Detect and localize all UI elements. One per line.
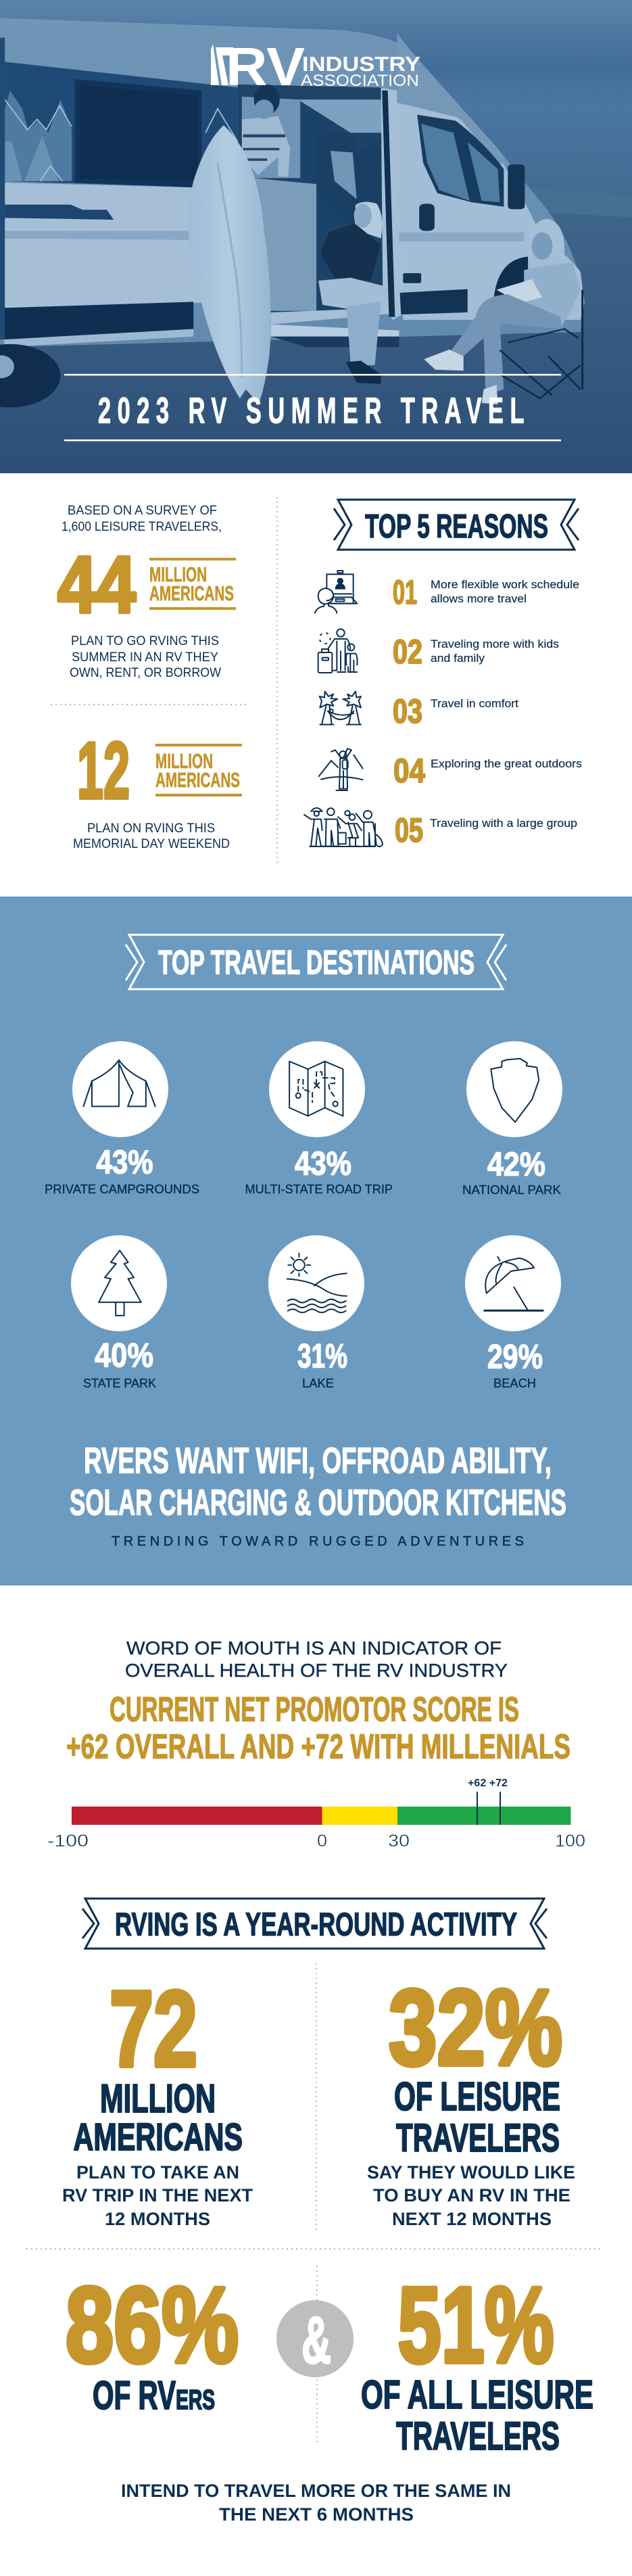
woman in doorway	[355, 201, 382, 239]
subheading: trending: TRENDING TOWARD RUGGED ADVENTURES	[112, 1534, 524, 1549]
destination: beach	[465, 1235, 561, 1390]
heading: current nps	[66, 1690, 570, 1766]
logo	[211, 37, 420, 97]
stat: 32 percent of leisure travelers	[367, 1967, 575, 2229]
sky	[0, 0, 632, 229]
chart: nps scale bar: 30	[388, 1832, 410, 1851]
text: word of mouth	[125, 1638, 508, 1681]
text: memorial day	[73, 821, 230, 851]
stat: 12 million americans	[77, 726, 242, 815]
logo: RV	[226, 37, 305, 97]
panel: net promoter score	[47, 1638, 585, 1851]
text: memorial day: MEMORIAL DAY WEEKEND	[73, 836, 230, 851]
text: plan to go rving: PLAN TO GO RVING THIS	[71, 634, 219, 648]
destination: lake: 31%	[297, 1337, 347, 1375]
panel: hero photo	[0, 0, 632, 473]
cab upper	[397, 33, 508, 164]
destination: state park: 40%	[95, 1336, 153, 1374]
stat: 72 million americans	[62, 1969, 253, 2229]
survey intro: BASED ON A SURVEY OF	[68, 503, 217, 518]
stat: 44 million americans: 44	[57, 540, 136, 630]
logo: ASSOCIATION	[301, 72, 419, 90]
callout: rvers want	[70, 1440, 566, 1523]
stat: 72 million americans: AMERICANS	[73, 2116, 243, 2159]
tree graphics	[5, 91, 72, 181]
stat: 72 million americans: MILLION	[100, 2076, 216, 2121]
text: plan to go rving: OWN, RENT, OR BORROW	[70, 665, 222, 680]
destination: private campgrounds: PRIVATE CAMPGROUNDS	[45, 1183, 199, 1196]
ribbon: top 5 reasons	[334, 500, 579, 550]
step	[271, 308, 389, 325]
left edge strip	[0, 38, 5, 339]
reason 2: Traveling more with kids	[431, 638, 559, 650]
chart: nps scale bar	[47, 1778, 585, 1851]
destination: multi-state road trip: MULTI-STATE ROAD TRIP	[245, 1183, 393, 1196]
stat: 12 million americans: MILLION	[155, 749, 213, 773]
text: intend to travel: THE NEXT 6 MONTHS	[219, 2504, 414, 2525]
stat: 72 million americans: PLAN TO TAKE AN	[76, 2162, 239, 2183]
lower body panel	[5, 183, 238, 308]
ribbon: rving is a year-round activity	[82, 1899, 547, 1949]
text: intend to travel	[121, 2481, 511, 2525]
text: word of mouth: WORD OF MOUTH IS AN INDICATOR OF	[126, 1638, 502, 1659]
door interior	[238, 85, 393, 314]
stat: 72 million americans: 72	[110, 1969, 197, 2089]
panel: survey stats	[51, 503, 249, 851]
cab door	[397, 103, 585, 320]
survey intro	[62, 503, 222, 534]
counter	[254, 178, 316, 311]
destination: national park: NATIONAL PARK	[462, 1183, 561, 1197]
cab seat	[314, 131, 387, 229]
reason 5: 05	[395, 811, 423, 849]
stat: 72 million americans: 12 MONTHS	[105, 2209, 210, 2229]
cab window	[417, 115, 504, 207]
chart: nps scale bar: 0	[317, 1832, 327, 1851]
stat: 72 million americans: RV TRIP IN THE NEXT	[62, 2185, 253, 2205]
reason 4: 04	[393, 752, 425, 790]
camp chair	[500, 290, 583, 398]
ampersand badge	[276, 2300, 354, 2377]
destination: beach: BEACH	[493, 1377, 536, 1390]
stat: 32 percent of leisure travelers: NEXT 12 MONTHS	[392, 2209, 552, 2229]
destination: private campgrounds	[45, 1041, 199, 1196]
reason 4: Exploring the great outdoors	[431, 757, 582, 770]
stat: 32 percent of leisure travelers: 32%	[389, 1967, 562, 2088]
destination: lake: LAKE	[302, 1377, 334, 1390]
surfboard	[189, 125, 271, 405]
ribbon: top travel destinations	[126, 934, 506, 989]
ribbon: top travel destinations: TOP TRAVEL DESTINATIONS	[158, 944, 475, 982]
stat: 86 percent of rvers: OF RVERS	[93, 2373, 215, 2418]
mirror	[508, 164, 525, 209]
door frame	[381, 87, 403, 320]
reason 1: 01	[393, 573, 417, 611]
chart: nps scale bar: -100	[47, 1832, 89, 1851]
reason 3: Travel in comfort	[431, 697, 518, 710]
icon: tent	[83, 1060, 155, 1106]
panel: top travel destinations	[0, 897, 632, 1585]
text: memorial day: PLAN ON RVING THIS	[87, 821, 215, 836]
icon: hiker with mountains	[319, 748, 363, 790]
reason 2: 02	[393, 633, 422, 671]
destination: state park	[71, 1235, 167, 1390]
destination: private campgrounds: 43%	[96, 1144, 153, 1180]
reason 1: allows more travel	[431, 592, 527, 605]
wheel arch	[493, 256, 528, 299]
destination: lake	[268, 1235, 364, 1390]
text: plan to go rving	[70, 634, 222, 680]
stat: 32 percent of leisure travelers: OF LEISURE	[394, 2074, 560, 2119]
cab lower stripe	[400, 289, 468, 314]
stat: 51 percent of all leisure travelers: 51%	[397, 2265, 554, 2385]
logo: INDUSTRY	[302, 52, 420, 76]
side window	[74, 79, 201, 188]
panel: top 5 reasons	[304, 500, 582, 849]
stat: 32 percent of leisure travelers: TRAVELERS	[396, 2116, 560, 2160]
grey line on body	[399, 233, 524, 241]
icon: hammock and palms	[320, 692, 361, 725]
front wheel	[0, 344, 60, 408]
icon: pine tree	[99, 1250, 141, 1316]
ribbon: top 5 reasons: TOP 5 REASONS	[365, 508, 548, 545]
grass field	[0, 211, 632, 473]
icon: remote worker	[315, 571, 357, 613]
stat: 86 percent of rvers	[66, 2265, 239, 2418]
side trim	[5, 205, 114, 220]
reason 1	[393, 573, 579, 611]
man	[242, 116, 290, 176]
icon: family with suitcase	[318, 629, 358, 673]
dark decor band	[5, 62, 238, 189]
stat: 51 percent of all leisure travelers: TRAVELERS	[396, 2414, 560, 2458]
van body	[0, 18, 585, 347]
text: word of mouth: OVERALL HEALTH OF THE RV INDUSTRY	[125, 1660, 508, 1681]
reason 5	[395, 811, 577, 849]
reason 5: Traveling with a large group	[430, 817, 577, 830]
text: intend to travel: INTEND TO TRAVEL MORE OR THE SAME IN	[121, 2481, 511, 2501]
text: plan to go rving: SUMMER IN AN RV THEY	[72, 650, 218, 665]
distant hills	[532, 189, 632, 229]
reason 1: More flexible work schedule	[431, 578, 579, 591]
destination: national park	[462, 1041, 562, 1197]
destination: state park: STATE PARK	[83, 1377, 156, 1390]
icon: sun over lake	[287, 1254, 347, 1312]
stat: 12 million americans: AMERICANS	[155, 768, 240, 792]
icon: map	[289, 1062, 343, 1116]
seated woman	[528, 219, 564, 260]
reason 3	[393, 692, 518, 730]
stat: 32 percent of leisure travelers: TO BUY AN RV IN THE	[373, 2185, 570, 2205]
icon: travel group	[304, 808, 383, 846]
chart: nps scale bar: 100	[555, 1832, 585, 1851]
stat: 44 million americans: MILLION	[149, 563, 207, 586]
icon: beach umbrella	[485, 1257, 543, 1310]
stat: 32 percent of leisure travelers: SAY THEY WOULD LIKE	[367, 2162, 575, 2183]
destination: national park: 42%	[487, 1147, 545, 1183]
chart: nps scale bar: +62 +72	[468, 1778, 508, 1789]
stat: 44 million americans: AMERICANS	[149, 581, 234, 605]
ampersand badge: &	[301, 2303, 331, 2377]
destination: multi-state road trip: 43%	[295, 1145, 351, 1182]
stat: 51 percent of all leisure travelers	[361, 2265, 593, 2458]
panel: year-round stats	[26, 1963, 600, 2525]
door handle	[419, 204, 435, 231]
stat: 12 million americans: 12	[77, 726, 130, 815]
survey intro: 1,600 LEISURE TRAVELERS,	[62, 519, 222, 534]
destination: multi-state road trip	[245, 1041, 393, 1196]
icon: arrowhead	[491, 1059, 539, 1122]
stat: 44 million americans	[57, 540, 236, 630]
reason 2: and family	[431, 652, 485, 665]
reason 4	[393, 752, 582, 790]
destination: beach: 29%	[487, 1337, 543, 1375]
reason 2	[393, 633, 559, 671]
reason 3: 03	[393, 692, 422, 730]
stat: 86 percent of rvers: 86%	[66, 2265, 239, 2385]
